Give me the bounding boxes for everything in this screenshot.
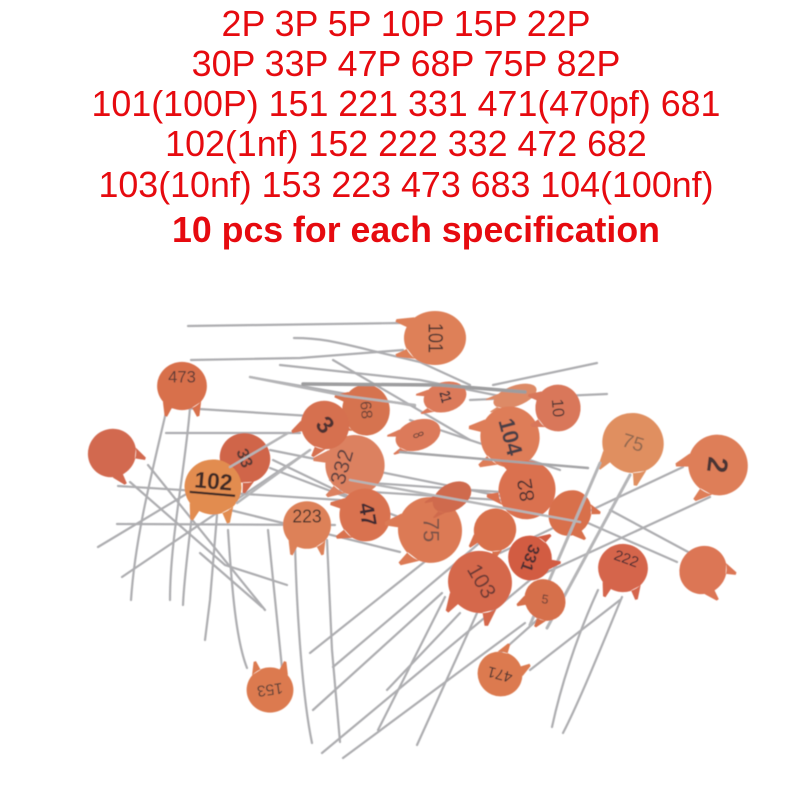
capacitor: 104: 104 [493, 416, 527, 459]
capacitor: center 75: 75 [418, 518, 443, 542]
capacitor: 33 [207, 424, 279, 498]
wires: back layer of capacitor leads [98, 323, 710, 758]
capacitor: 222 [596, 542, 650, 601]
text line: 101 to 681: 101(100P) 151 221 331 471(470pf) 681 [92, 84, 720, 124]
capacitor: blank left [78, 419, 151, 491]
capacitor: 82 [483, 450, 564, 527]
capacitor: 153: 153 [256, 679, 284, 699]
capacitor: 5 behind leads [512, 571, 574, 633]
text line: 30P to 82P: 30P 33P 47P 68P 75P 82P [192, 44, 620, 84]
capacitor: tilted dark label [414, 377, 470, 419]
capacitor: 222: 222 [612, 547, 641, 571]
capacitor: 332: 332 [327, 447, 358, 487]
capacitor: 102 [182, 457, 244, 525]
capacitor: 471: 471 [486, 662, 514, 685]
capacitor: 103 [436, 542, 521, 630]
capacitor: 47: 47 [354, 501, 380, 528]
photo: pile of ceramic disc capacitors [78, 311, 758, 758]
capacitor: hidden right [540, 482, 605, 547]
capacitor: 33: 33 [232, 446, 257, 470]
capacitor: 2: 2 [700, 455, 734, 475]
capacitor: 10 [527, 383, 583, 434]
capacitor: lower right partial [670, 537, 741, 607]
capacitor: 82: 82 [513, 477, 540, 503]
capacitor: 10: 10 [548, 398, 567, 418]
capacitor: 332 [309, 427, 393, 506]
capacitor: top-left 473 [157, 362, 207, 417]
capacitor: 5 behind leads: 5 [541, 592, 550, 607]
capacitor: 471 [468, 638, 536, 706]
text line: 103 to 104: 103(10nf) 153 223 473 683 104(100nf) [98, 165, 714, 205]
capacitor: 102: 102 [193, 466, 234, 496]
capacitor: center 75 [380, 488, 471, 575]
capacitor: 101 [395, 311, 466, 365]
capacitor: partial 68 [463, 501, 524, 565]
capacitor: top-left 473: 473 [168, 368, 196, 387]
capacitor: tilted dark label: 21 [436, 389, 456, 404]
capacitor: top-right 75: 75 [619, 429, 647, 457]
capacitor: small edge-on [484, 379, 540, 415]
capacitor: 101: 101 [423, 323, 447, 353]
capacitor: 3 [286, 391, 359, 463]
capacitor: 223 [283, 501, 331, 555]
capacitor: rear 68 [334, 383, 392, 438]
capacitor: 223: 223 [292, 506, 322, 527]
capacitor: 153 [247, 661, 293, 713]
capacitor: 2 [670, 424, 758, 510]
wires: front layer [230, 377, 630, 628]
capacitor: 47 [328, 485, 395, 547]
capacitor: 331 [502, 527, 564, 587]
capacitor: 331: 331 [517, 542, 543, 574]
capacitor: rear 68: 68 [356, 400, 375, 420]
capacitor: tilted 8 [385, 413, 445, 459]
capacitor: 103: 103 [462, 560, 501, 603]
capacitor: top-right 75 [589, 403, 674, 491]
capacitor: 3: 3 [310, 412, 339, 439]
text line: quantity note: 10 pcs for each specification [172, 210, 660, 250]
capacitor: tilted near 82 [422, 475, 477, 522]
capacitor: 104 [466, 400, 546, 476]
heading: capacitor value list [92, 4, 720, 250]
text line: 102 to 682: 102(1nf) 152 222 332 472 682 [165, 124, 647, 164]
text line: 2P to 22P: 2P 3P 5P 10P 15P 22P [222, 4, 590, 44]
capacitor: tilted 8: 8 [409, 430, 427, 440]
